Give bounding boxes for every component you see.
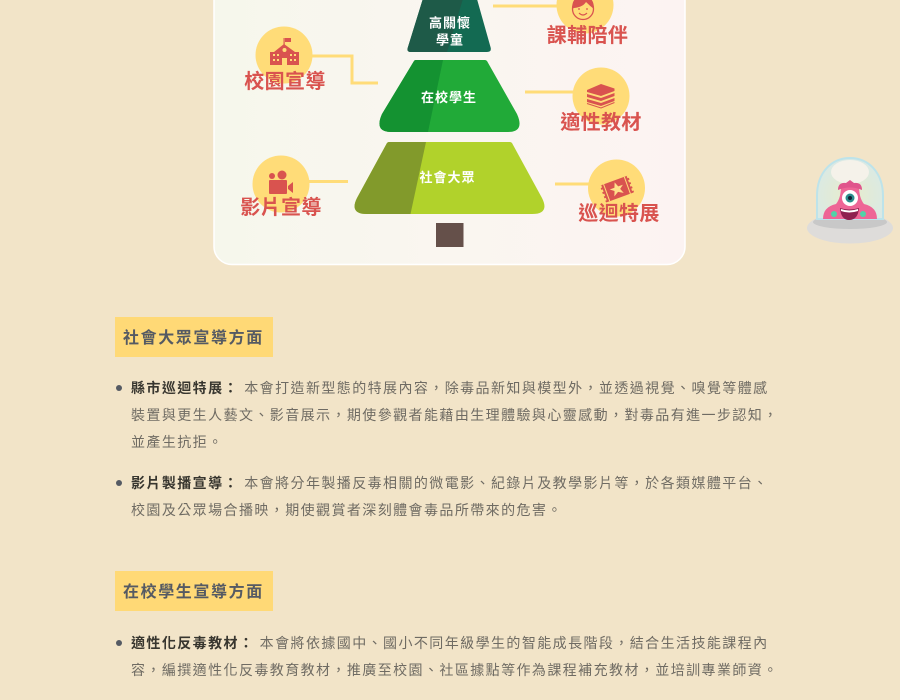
text block: touring exhibition: 裝置與更生人藝文、影音展示，期使參觀者能藉由生理體驗與心靈感動，對毒品有進一步認知，: [131, 407, 779, 423]
icon: books: [587, 84, 614, 108]
tier labels: [419, 16, 477, 185]
icon: ticket: [600, 175, 634, 203]
mascot: alien in dome: [807, 158, 893, 244]
icon: video camera: [269, 170, 293, 194]
tier labels: 高關懷: [429, 16, 471, 30]
callout labels: [240, 23, 660, 225]
tree: middle tier: [379, 60, 520, 132]
heading: public outreach: [115, 317, 273, 357]
callout labels: 影片宣導: [240, 196, 322, 219]
text block: film production: [131, 475, 769, 518]
infographic panel: prevention tree: [213, 0, 893, 266]
connector lines: [308, 6, 600, 184]
icon: school: [270, 38, 299, 65]
tier labels: 社會大眾: [419, 170, 476, 185]
tree trunk: [436, 223, 464, 247]
bullet marker: [116, 480, 122, 486]
icon: child face: [572, 0, 594, 20]
icon circles: [252, 0, 645, 216]
bullet marker: [116, 640, 122, 646]
callout labels: 課輔陪伴: [547, 23, 628, 47]
text block: touring exhibition: 縣市巡迴特展： 本會打造新型態的特展內容，除毒品新知與模型外，並透過視覺、嗅覺等體感: [131, 380, 769, 396]
text block: touring exhibition: [131, 380, 779, 450]
tier labels: 在校學生: [421, 90, 477, 105]
heading: public outreach: 社會大眾宣導方面: [123, 330, 264, 347]
text block: teaching materials: 適性化反毒教材： 本會將依據國中、國小不同年級學生的智能成長階段，結合生活技能課程內: [131, 635, 769, 651]
heading: student outreach: [115, 571, 273, 611]
callout labels: 適性教材: [560, 110, 642, 134]
tree: top tier: [407, 0, 491, 52]
text block: touring exhibition: 並產生抗拒。: [131, 434, 224, 450]
tree: bottom tier: [355, 142, 544, 214]
heading: student outreach: 在校學生宣導方面: [123, 584, 264, 601]
bullet marker: [116, 385, 122, 391]
text block: teaching materials: 容，編撰適性化反毒教育教材，推廣至校園、社區據點等作為課程補充教材，並培訓專業師資。: [131, 662, 779, 678]
callout labels: 校園宣導: [244, 69, 326, 93]
tier labels: 學童: [436, 32, 464, 48]
callout labels: 巡迴特展: [578, 202, 660, 225]
text block: film production: 影片製播宣導： 本會將分年製播反毒相關的微電影、紀錄片及教學影片等，於各類媒體平台、: [131, 475, 769, 491]
text block: film production: 校園及公眾場合播映，期使觀賞者深刻體會毒品所帶來的危害。: [131, 502, 563, 518]
text block: teaching materials: [131, 635, 779, 678]
